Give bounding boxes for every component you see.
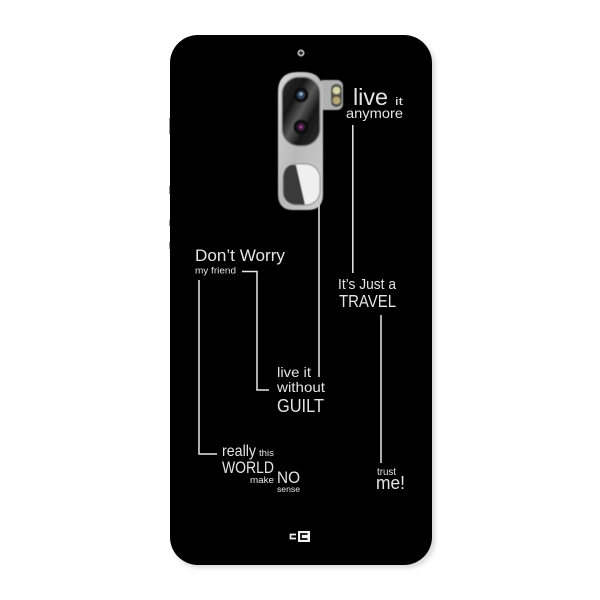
phone shadow: [172, 38, 435, 568]
upper lens: [294, 88, 308, 102]
text: Don't Worry my friend: [195, 246, 285, 276]
text: live it anymore: live: [353, 84, 388, 110]
camera module: [278, 72, 343, 210]
side buttons: [169, 118, 170, 249]
lower lens: [294, 120, 308, 134]
text: live it without GUILT: [276, 364, 325, 416]
icon: CC brand logo: [290, 531, 310, 542]
flash unit: [318, 80, 343, 110]
text: live it without GUILT: live it: [277, 364, 311, 380]
text: It's Just a TRAVEL: TRAVEL: [339, 291, 396, 311]
text: live it anymore: anymore: [346, 105, 403, 121]
text: live it without GUILT: GUILT: [277, 395, 324, 416]
text: live it without GUILT: without: [276, 379, 325, 395]
icon: microphone dot: [297, 49, 305, 57]
connector lines: [199, 125, 381, 463]
text: live it anymore: [346, 84, 403, 121]
text: trust me: me!: [376, 473, 405, 493]
text: live it anymore: it: [395, 96, 403, 108]
text: It's Just a TRAVEL: [338, 276, 397, 311]
text: really this WORLD make NO sense: [222, 443, 301, 494]
text: really this WORLD make NO sense: sense: [277, 485, 301, 494]
lens panel: [282, 77, 320, 146]
text: Don't Worry my friend: Don’t Worry: [195, 246, 285, 265]
text: really this WORLD make NO sense: this: [259, 448, 274, 459]
text: Don't Worry my friend: my friend: [195, 266, 236, 276]
text: really this WORLD make NO sense: make: [250, 475, 274, 486]
text: really this WORLD make NO sense: WORLD: [222, 459, 274, 477]
text: really this WORLD make NO sense: really: [222, 443, 256, 460]
metal housing: [278, 72, 323, 210]
text: It's Just a TRAVEL: It’s Just a: [338, 276, 397, 293]
phone back panel: [170, 35, 432, 565]
text: really this WORLD make NO sense: NO: [277, 469, 300, 487]
text: trust me: trust: [377, 467, 396, 478]
fingerprint sensor: [283, 164, 320, 205]
